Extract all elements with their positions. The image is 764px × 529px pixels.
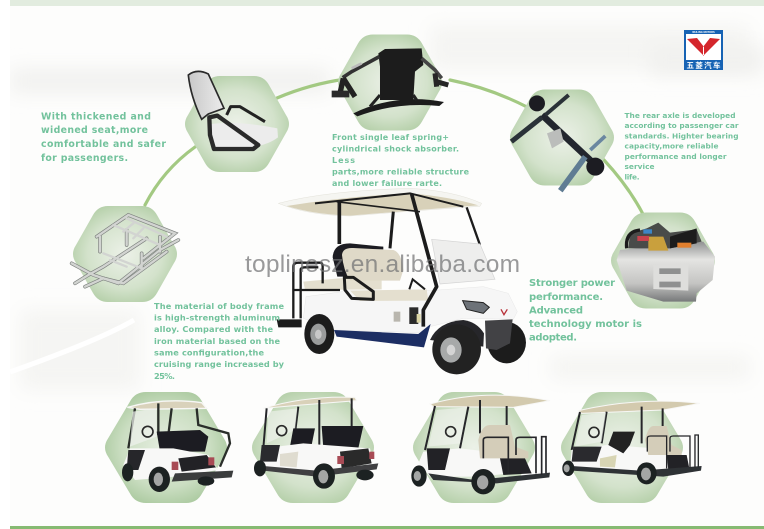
text: seat description: With thickened and — [41, 112, 151, 122]
text: rear axle description — [624, 111, 739, 182]
text: seat description — [41, 112, 166, 164]
logo: Wuling — [684, 30, 723, 70]
roof frame and posts — [315, 193, 480, 248]
panel: rear axle hexagon — [510, 90, 614, 186]
rear rack — [293, 263, 340, 318]
panel: motor hexagon — [611, 212, 715, 308]
text: motor description: performance. — [529, 292, 603, 303]
panel: front suspension hexagon — [338, 34, 442, 130]
text: rear axle description: service — [624, 162, 654, 171]
text: body frame description: iron material based on the — [154, 336, 280, 346]
text: motor description: Stronger power — [529, 278, 615, 289]
logo: Wuling: WULING MOTORS — [692, 30, 715, 34]
text: motor description: Advanced — [529, 306, 583, 316]
body — [303, 287, 517, 333]
text: front suspension description: Front single leaf spring+ — [332, 133, 449, 142]
text: motor description: adopted. — [529, 332, 577, 344]
front seat cushion — [350, 289, 428, 301]
front bumper — [485, 319, 513, 350]
icon: seat — [188, 71, 278, 149]
text: body frame description: same configuration,the — [154, 348, 264, 358]
text: front suspension description: Less — [332, 156, 355, 165]
watermark: toplinesz.en.alibaba.com — [245, 251, 520, 278]
windscreen — [432, 239, 495, 284]
icon: front suspension — [332, 48, 448, 116]
text: body frame description — [154, 301, 285, 381]
far front wheel — [487, 322, 526, 363]
panel: bottom hexagon 2 — [252, 392, 374, 503]
front wheel — [432, 324, 481, 374]
text: seat description: for passengers. — [41, 153, 128, 164]
right armrest — [409, 279, 425, 289]
car: main golf cart — [277, 188, 526, 374]
connecting arc — [145, 79, 645, 218]
text: body frame description: alloy. Compared with the — [154, 324, 273, 334]
bottom cart 1 — [122, 401, 233, 492]
text: front suspension description: and lower failure rarte. — [332, 179, 442, 188]
text: body frame description: 25%. — [154, 371, 175, 381]
text: motor description: technology motor is — [529, 319, 642, 330]
text: body frame description: cruising range increased by — [154, 359, 285, 369]
armrest — [344, 277, 373, 299]
bottom cart 3 — [411, 395, 550, 494]
a-pillar — [412, 194, 437, 327]
text: seat description: comfortable and safer — [41, 139, 166, 150]
navy sill — [334, 324, 431, 347]
headlight — [463, 301, 489, 313]
text: seat description: widened seat,more — [41, 125, 148, 136]
icon: rear axle — [511, 95, 605, 191]
front seat back — [342, 248, 403, 281]
text: body frame description: is high-strength aluminum — [154, 312, 280, 322]
side panel details — [394, 307, 421, 324]
text: front suspension description: cylindrical shock absorber. — [332, 144, 459, 154]
bottom cart 2 — [254, 397, 378, 489]
logo: Wuling: 五菱汽车 — [686, 60, 721, 70]
text: front suspension description — [332, 133, 470, 188]
text: rear axle description: according to passenger car — [624, 121, 739, 130]
text: rear axle description: performance and longer — [624, 152, 727, 161]
rear seat back — [333, 243, 383, 277]
rear platform — [277, 319, 302, 327]
text: rear axle description: standards. Highter bearing — [624, 132, 738, 140]
text: rear axle description: life. — [624, 172, 640, 182]
panel: frame hexagon — [73, 206, 177, 302]
text: motor description — [529, 278, 642, 344]
icon: motor — [617, 223, 715, 302]
bottom cart 4 — [562, 401, 702, 484]
front fender — [430, 320, 484, 347]
panel: bottom hexagon 4 — [561, 392, 683, 503]
text: rear axle description: The rear axle is developed — [624, 111, 736, 120]
panel: bottom hexagon 3 — [413, 392, 535, 503]
rear wheel — [304, 314, 334, 354]
panel: bottom hexagon 1 — [105, 392, 227, 503]
panel: seat hexagon — [185, 76, 289, 172]
brand mark — [501, 309, 507, 315]
rear seat cushion — [303, 277, 382, 290]
icon: chassis frame — [72, 215, 178, 287]
text: body frame description: The material of body frame — [154, 301, 284, 311]
text: front suspension description: parts,more reliable structure — [332, 168, 470, 176]
roof — [278, 188, 482, 216]
text: rear axle description: capacity,more reliable — [624, 142, 718, 150]
